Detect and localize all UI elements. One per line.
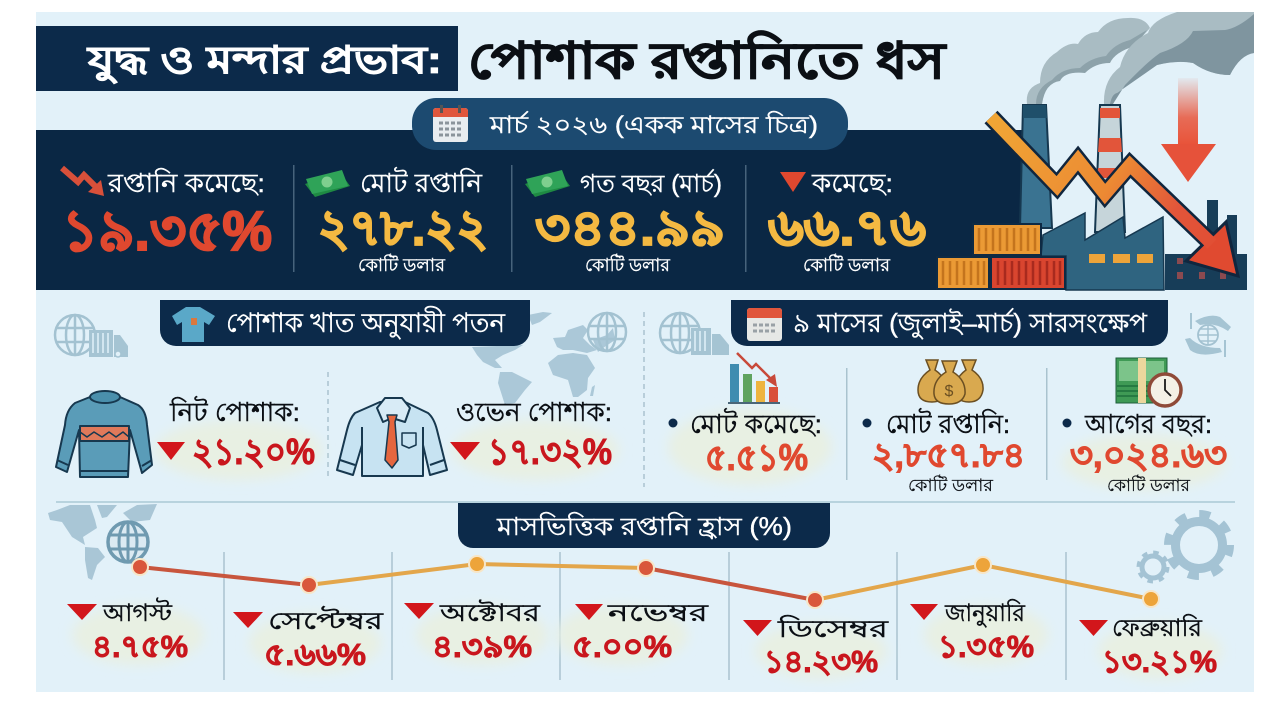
icon: world map and globe bbox=[48, 504, 157, 580]
containers bbox=[937, 224, 1065, 289]
title: পোশাক রপ্তানিতে ধস bbox=[468, 31, 947, 89]
stat: total export bbox=[305, 167, 488, 275]
factory building bbox=[1041, 213, 1164, 290]
smoke bbox=[1027, 12, 1254, 104]
title: যুদ্ধ ও মন্দার প্রভাব: bbox=[86, 40, 442, 85]
stat: previous year: আগের বছর: bbox=[1084, 409, 1212, 439]
month: august bbox=[67, 598, 204, 665]
stat: decreased amount bbox=[768, 168, 926, 275]
month: october bbox=[404, 600, 548, 665]
title bbox=[36, 26, 947, 91]
heading: monthly decline: মাসভিত্তিক রপ্তানি হ্রাস (%) bbox=[496, 512, 792, 541]
stat: total export: মোট রপ্তানি bbox=[360, 167, 482, 198]
small dark building bbox=[1165, 200, 1247, 290]
heading: monthly decline bbox=[458, 503, 830, 548]
stat: decreased amount: কোটি ডলার bbox=[803, 254, 891, 275]
woven garments: ১৭.৩২% bbox=[488, 431, 612, 472]
month: november: ৫.০০% bbox=[572, 629, 672, 664]
date pill: মার্চ ২০২৬ (একক মাসের চিত্র) bbox=[489, 110, 818, 139]
stat: total export: ২৭৮.২২ bbox=[318, 200, 488, 256]
stat: last year: কোটি ডলার bbox=[585, 254, 671, 275]
stat: total export bbox=[862, 360, 1025, 495]
knit garments: নিট পোশাক: bbox=[169, 396, 300, 427]
heading: garment sector: পোশাক খাত অনুযায়ী পতন bbox=[226, 306, 506, 339]
line chart bbox=[132, 556, 1159, 608]
icon: gears bbox=[1138, 514, 1230, 582]
month: october: অক্টোবর bbox=[439, 600, 541, 627]
stat: export decline bbox=[62, 168, 272, 262]
month: november: নভেম্বর bbox=[607, 600, 709, 627]
icon: falling bar chart bbox=[728, 353, 780, 403]
icon: t-shirt bbox=[172, 307, 215, 342]
knit garments bbox=[56, 391, 322, 480]
arrow: red down bbox=[1161, 78, 1216, 182]
month: november bbox=[556, 600, 709, 665]
icon: cash and clock bbox=[1116, 358, 1181, 406]
month: december: ১৪.২৩% bbox=[764, 644, 878, 679]
dashed dividers bbox=[328, 312, 644, 487]
month: february: ফেব্রুয়ারি bbox=[1112, 614, 1203, 642]
month: january bbox=[910, 599, 1048, 665]
stat: total decline: ৫.৫১% bbox=[705, 437, 808, 478]
panel: march 2026 key figures bbox=[36, 130, 1022, 290]
month: september bbox=[233, 606, 384, 673]
icon: money bags: $ bbox=[945, 383, 954, 400]
stat: total decline bbox=[668, 353, 832, 485]
panel: garment sector decline bbox=[56, 300, 619, 480]
panel: monthly export decline bbox=[48, 503, 1230, 680]
icon: globe right bbox=[588, 313, 626, 351]
background icons section 2 bbox=[55, 312, 1231, 405]
icon: money bags bbox=[918, 360, 983, 404]
heading: nine month summary: ৯ মাসের (জুলাই–মার্চ) সারসংক্ষেপ bbox=[793, 308, 1147, 339]
month: august: ৪.৭৫% bbox=[92, 629, 188, 664]
stat: total export: কোটি ডলার bbox=[908, 475, 994, 495]
month: january: জানুয়ারি bbox=[944, 599, 1026, 627]
stat: decreased amount: কমেছে: bbox=[811, 168, 893, 198]
month: september: ৫.৬৬% bbox=[264, 637, 366, 672]
month: december bbox=[743, 615, 889, 679]
icon: shirt and tie bbox=[337, 398, 447, 476]
woven garments bbox=[337, 397, 619, 480]
world map bbox=[472, 312, 615, 405]
month: january: ১.৩৫% bbox=[938, 629, 1034, 664]
icon: globe and truck left bbox=[55, 315, 128, 357]
stat: previous year: কোটি ডলার bbox=[1107, 475, 1191, 495]
stat: previous year bbox=[1062, 358, 1227, 495]
month: february bbox=[1079, 614, 1222, 679]
stat: total export: কোটি ডলার bbox=[358, 254, 446, 275]
knit garments: ২১.২০% bbox=[192, 431, 315, 472]
icon: sweater bbox=[56, 391, 152, 477]
arrow: zigzag decline bbox=[991, 117, 1238, 276]
icon: hands and globe bbox=[1185, 313, 1231, 357]
stat: export decline: ১৯.৩৫% bbox=[62, 199, 272, 262]
stat: previous year: ৩,০২৪.৬৩ bbox=[1070, 436, 1227, 475]
heading: nine month summary bbox=[731, 300, 1168, 346]
icon: calendar bbox=[747, 308, 782, 341]
heading: garment sector bbox=[160, 300, 530, 346]
section divider bbox=[56, 501, 1235, 503]
icon: calendar bbox=[433, 105, 468, 142]
stat: total export: মোট রপ্তানি: bbox=[886, 408, 1010, 439]
month: december: ডিসেম্বর bbox=[777, 615, 889, 643]
woven garments: ওভেন পোশাক: bbox=[456, 397, 612, 427]
illustration: factory with falling arrows bbox=[937, 12, 1254, 290]
month: august: আগস্ট bbox=[102, 598, 173, 627]
stat: export decline: রপ্তানি কমেছে: bbox=[107, 168, 265, 198]
chimneys bbox=[1020, 105, 1125, 232]
month: february: ১৩.২১% bbox=[1102, 644, 1217, 679]
date pill bbox=[412, 98, 848, 150]
icon: globe and truck centre bbox=[660, 313, 729, 355]
month: september: সেপ্টেম্বর bbox=[268, 606, 384, 635]
panel: nine month summary bbox=[668, 300, 1227, 495]
stat: total export: ২,৮৫৭.৮৪ bbox=[872, 436, 1025, 475]
stat: last year: গত বছর (মার্চ) bbox=[580, 169, 722, 198]
stat: last year: ৩৪৪.৯৯ bbox=[535, 200, 725, 256]
stat: last year bbox=[525, 169, 725, 275]
stat: decreased amount: ৬৬.৭৬ bbox=[768, 200, 926, 256]
stat: total decline: মোট কমেছে: bbox=[690, 408, 822, 439]
month: october: ৪.৩৯% bbox=[432, 629, 532, 664]
